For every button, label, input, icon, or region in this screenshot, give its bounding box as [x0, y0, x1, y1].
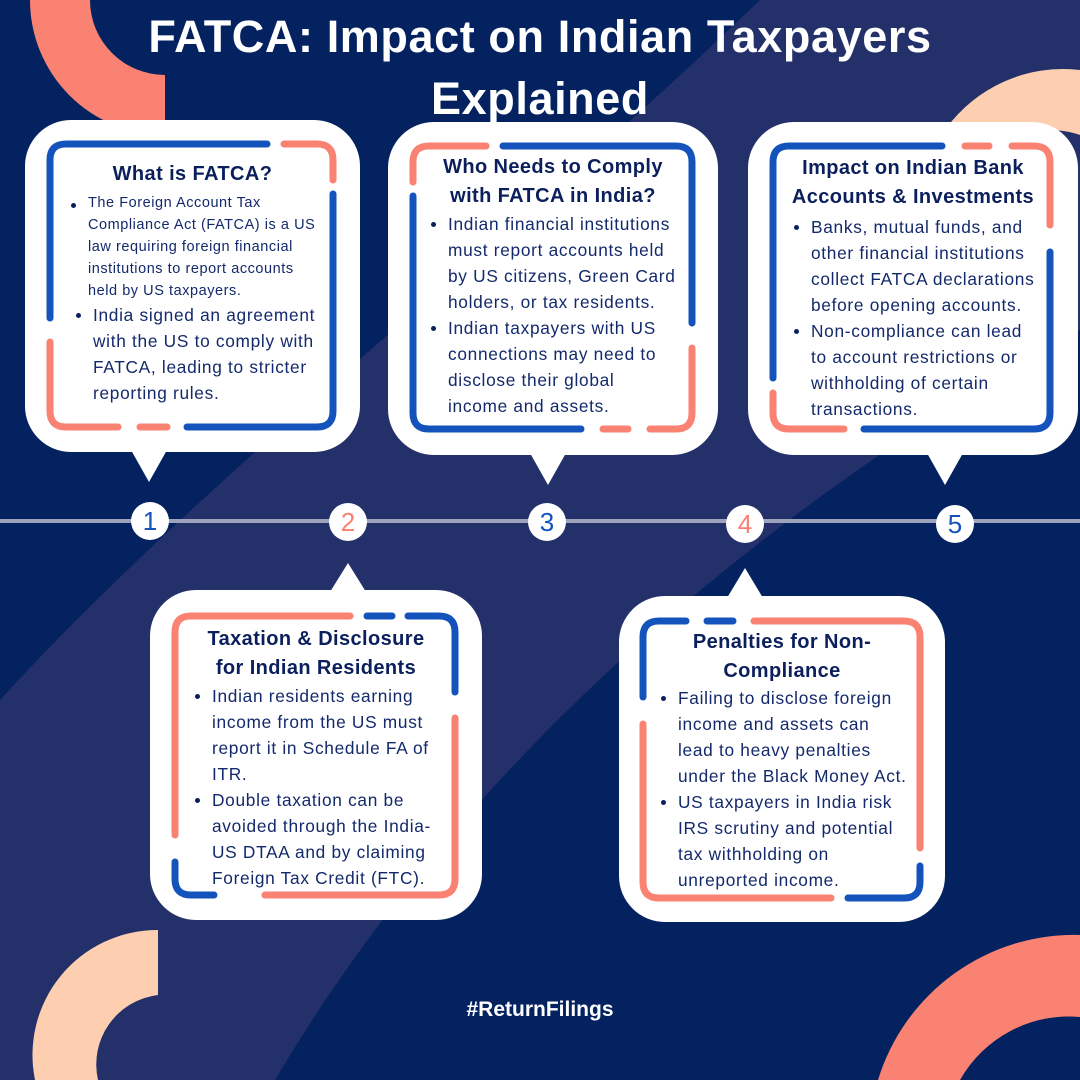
number 2: 2: [341, 507, 355, 537]
panel: what is FATCA: [25, 120, 360, 452]
heading: Compliance: [723, 660, 841, 682]
bullets: Indian residents earning: [212, 686, 413, 706]
panel: taxation & disclosure: [150, 590, 482, 920]
heading: for Indian Residents: [216, 657, 416, 679]
bullets: other financial institutions: [811, 243, 1025, 263]
bullets: to account restrictions or: [811, 347, 1017, 367]
bullets: Indian taxpayers with US: [448, 318, 656, 338]
heading: Taxation & Disclosure: [208, 628, 424, 650]
bullets: connections may need to: [448, 344, 656, 364]
timeline: [0, 519, 1080, 523]
bullets: report it in Schedule FA of: [212, 738, 429, 758]
bullets: under the Black Money Act.: [678, 766, 907, 786]
bullets: by US citizens, Green Card: [448, 266, 676, 286]
bullets: income and assets can: [678, 714, 869, 734]
bullets: US DTAA and by claiming: [212, 842, 426, 862]
footer hashtag: #ReturnFilings: [466, 998, 614, 1021]
bullets: withholding of certain: [811, 373, 989, 393]
bullets: reporting rules.: [93, 383, 219, 403]
number 2: [329, 503, 367, 541]
bullets: disclose their global: [448, 370, 614, 390]
bullets: income and assets.: [448, 396, 610, 416]
number 1: [131, 502, 169, 540]
panel: who needs to comply: [388, 122, 718, 455]
bullets: held by US taxpayers.: [88, 283, 241, 299]
bullets: [71, 195, 315, 403]
bullets: Failing to disclose foreign: [678, 688, 892, 708]
bullets: before opening accounts.: [811, 295, 1022, 315]
heading: What is FATCA?: [113, 163, 272, 185]
heading: Penalties for Non-: [693, 631, 871, 653]
heading: [208, 628, 424, 679]
bullets: India signed an agreement: [93, 305, 315, 325]
panel: penalties: [619, 596, 945, 922]
bullets: ITR.: [212, 764, 247, 784]
title: [148, 11, 932, 124]
bullets: tax withholding on: [678, 844, 829, 864]
heading: Impact on Indian Bank: [802, 157, 1024, 179]
panel: impact on bank accounts: [748, 122, 1078, 455]
heading: with FATCA in India?: [450, 185, 656, 207]
bullets: Banks, mutual funds, and: [811, 217, 1023, 237]
bullets: IRS scrutiny and potential: [678, 818, 893, 838]
bullets: unreported income.: [678, 870, 840, 890]
heading: Accounts & Investments: [792, 186, 1034, 208]
heading: [693, 631, 871, 682]
number 4: 4: [738, 509, 752, 539]
bullets: law requiring foreign financial: [88, 239, 293, 255]
bullets: transactions.: [811, 399, 918, 419]
bullets: income from the US must: [212, 712, 423, 732]
bullets: collect FATCA declarations: [811, 269, 1034, 289]
bullets: Foreign Tax Credit (FTC).: [212, 868, 425, 888]
heading: [792, 157, 1034, 208]
number 4: [726, 505, 764, 543]
title: FATCA: Impact on Indian Taxpayers: [148, 11, 932, 62]
bullets: holders, or tax residents.: [448, 292, 655, 312]
number 5: [936, 505, 974, 543]
heading: [443, 156, 663, 207]
title: Explained: [431, 73, 649, 124]
bullets: must report accounts held: [448, 240, 664, 260]
bullets: [431, 214, 676, 416]
bullets: US taxpayers in India risk: [678, 792, 892, 812]
bullets: [794, 217, 1034, 419]
bullets: The Foreign Account Tax: [88, 195, 261, 211]
bullets: [195, 686, 431, 888]
bullets: FATCA, leading to stricter: [93, 357, 307, 377]
bullets: with the US to comply with: [93, 331, 314, 351]
bullets: Indian financial institutions: [448, 214, 670, 234]
heading: Who Needs to Comply: [443, 156, 663, 178]
bullets: Compliance Act (FATCA) is a US: [88, 217, 315, 233]
bullets: [661, 688, 907, 890]
bullets: institutions to report accounts: [88, 261, 294, 277]
bullets: lead to heavy penalties: [678, 740, 871, 760]
number 3: 3: [540, 507, 554, 537]
number 5: 5: [948, 509, 962, 539]
number 3: [528, 503, 566, 541]
bullets: avoided through the India-: [212, 816, 431, 836]
number 1: 1: [143, 506, 157, 536]
bullets: Double taxation can be: [212, 790, 404, 810]
bullets: Non-compliance can lead: [811, 321, 1022, 341]
